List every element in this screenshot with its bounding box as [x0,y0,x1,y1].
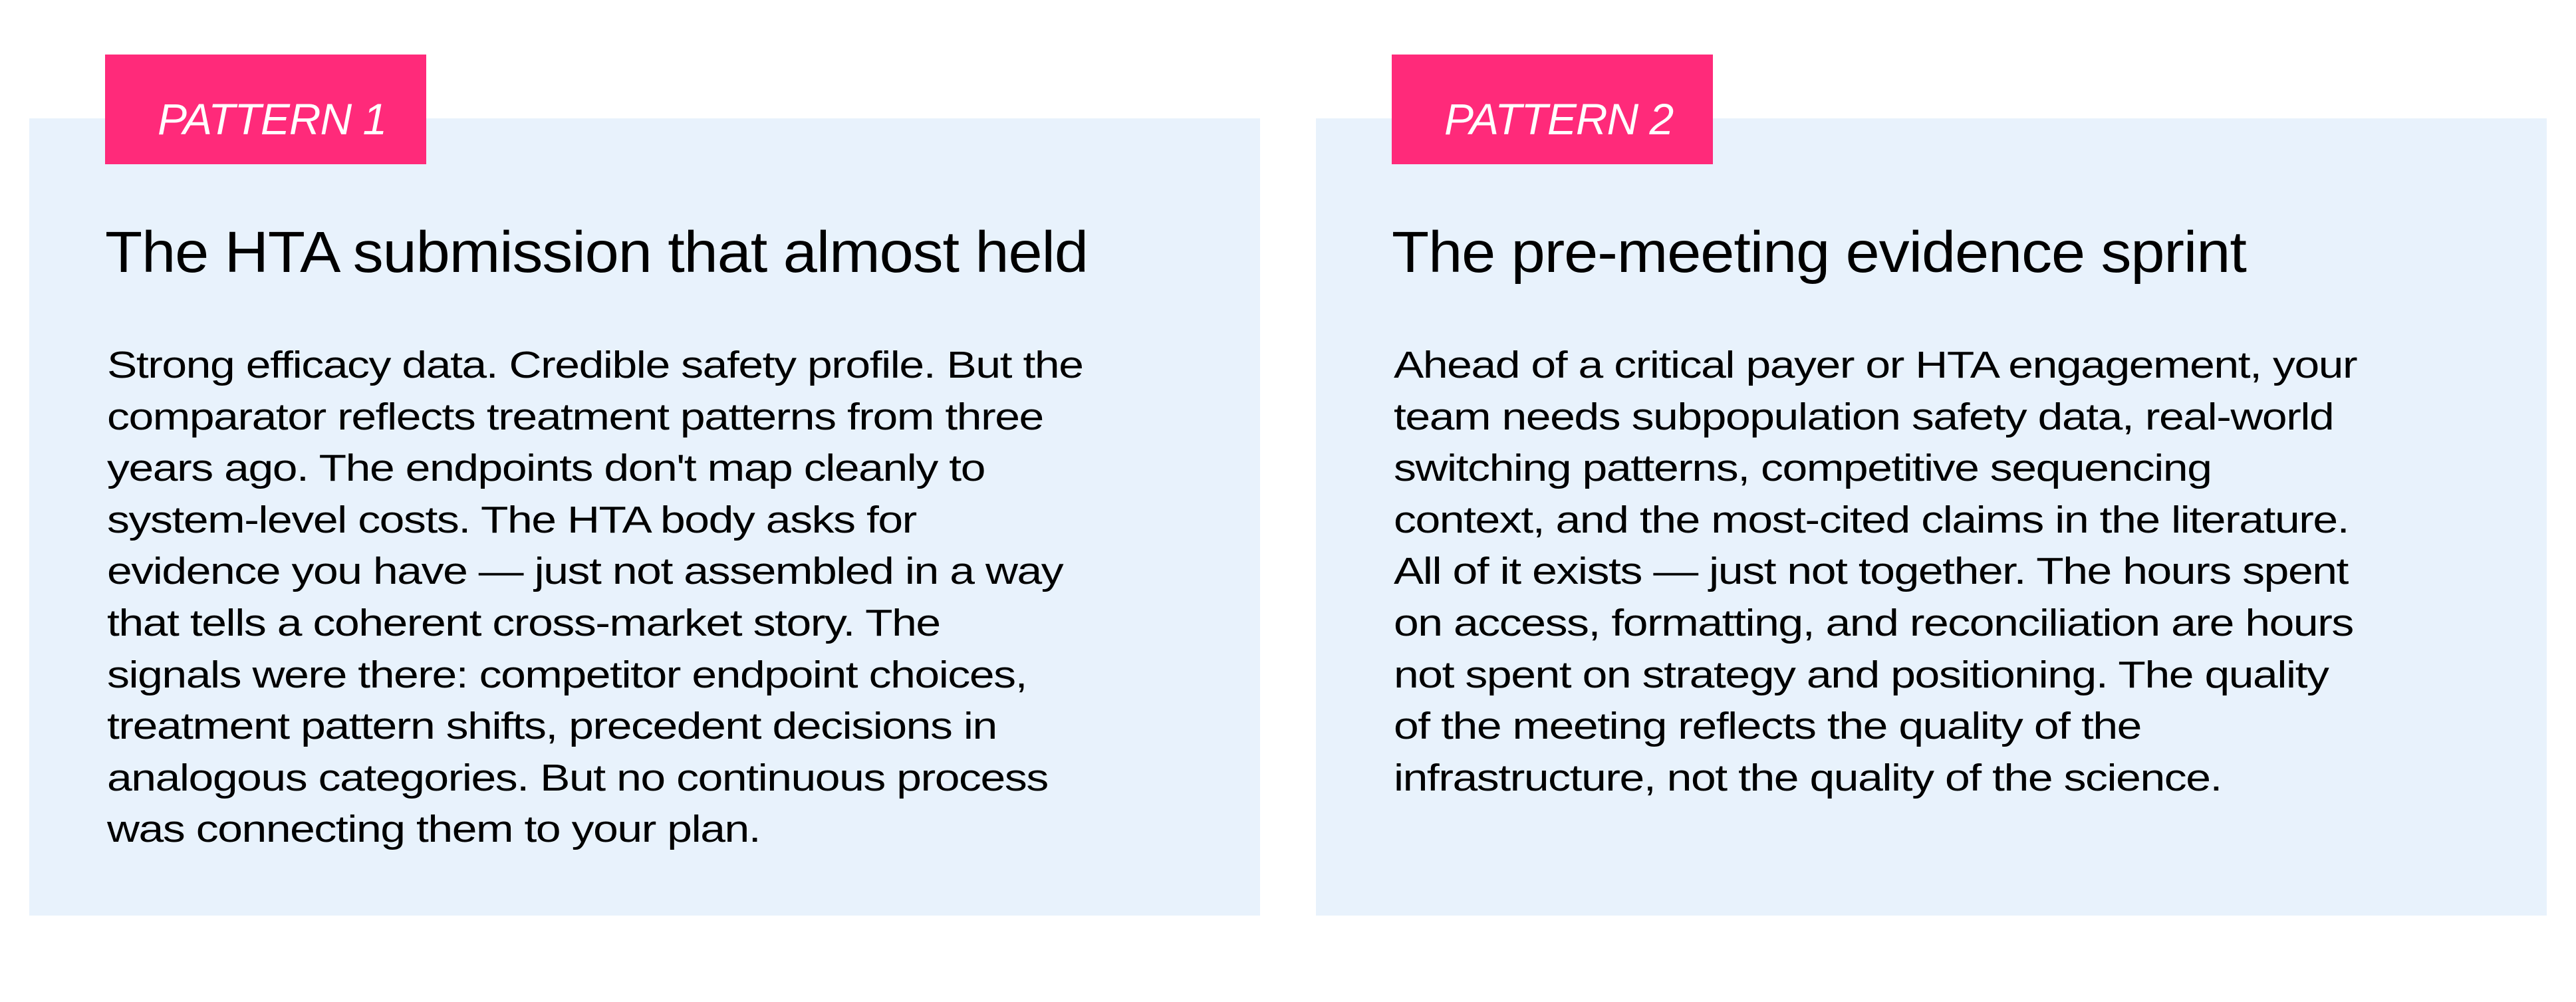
text block: pattern 2: Ahead of a critical payer or HTA engagement, your [1394,344,2357,386]
panel: pattern 2 [1316,118,2547,916]
text block: pattern 1: Strong efficacy data. Credible safety profile. But the [107,344,1083,386]
text block: pattern 1: comparator reflects treatment patterns from three [107,396,1043,438]
text block: pattern 2: on access, formatting, and reconciliation are hours [1394,602,2353,644]
text block: pattern 2: team needs subpopulation safety data, real-world [1394,396,2333,438]
heading: pattern 2: The pre-meeting evidence sprint [1392,220,2246,285]
text block: pattern 1: system-level costs. The HTA body asks for [107,499,916,541]
tag: pattern 1 [105,55,426,164]
tag: pattern 2 [1392,55,1713,164]
text block: pattern 1: that tells a coherent cross-market story. The [107,602,940,644]
tag: pattern 2: PATTERN 2 [1444,94,1673,144]
panel: pattern 1 [29,118,1260,916]
text block: pattern 2: infrastructure, not the quality of the science. [1394,757,2222,799]
tag: pattern 1: PATTERN 1 [158,94,386,144]
text block: pattern 1: years ago. The endpoints don't map cleanly to [107,447,985,489]
text block: pattern 2: not spent on strategy and positioning. The quality [1394,654,2329,696]
text block: pattern 1 [106,344,1083,850]
text block: pattern 1: evidence you have — just not assembled in a way [107,550,1063,592]
heading: pattern 1: The HTA submission that almost held [105,220,1088,285]
text block: pattern 2: All of it exists — just not together. The hours spent [1394,550,2348,592]
text block: pattern 1: analogous categories. But no continuous process [107,757,1048,799]
text block: pattern 2: of the meeting reflects the quality of the [1394,705,2141,747]
text block: pattern 1: signals were there: competitor endpoint choices, [107,654,1027,696]
text block: pattern 1: was connecting them to your plan. [107,808,760,850]
text block: pattern 2: switching patterns, competitive sequencing [1394,447,2211,489]
text block: pattern 2 [1394,344,2357,799]
text block: pattern 2: context, and the most-cited claims in the literature. [1394,499,2349,541]
text block: pattern 1: treatment pattern shifts, precedent decisions in [107,705,997,747]
